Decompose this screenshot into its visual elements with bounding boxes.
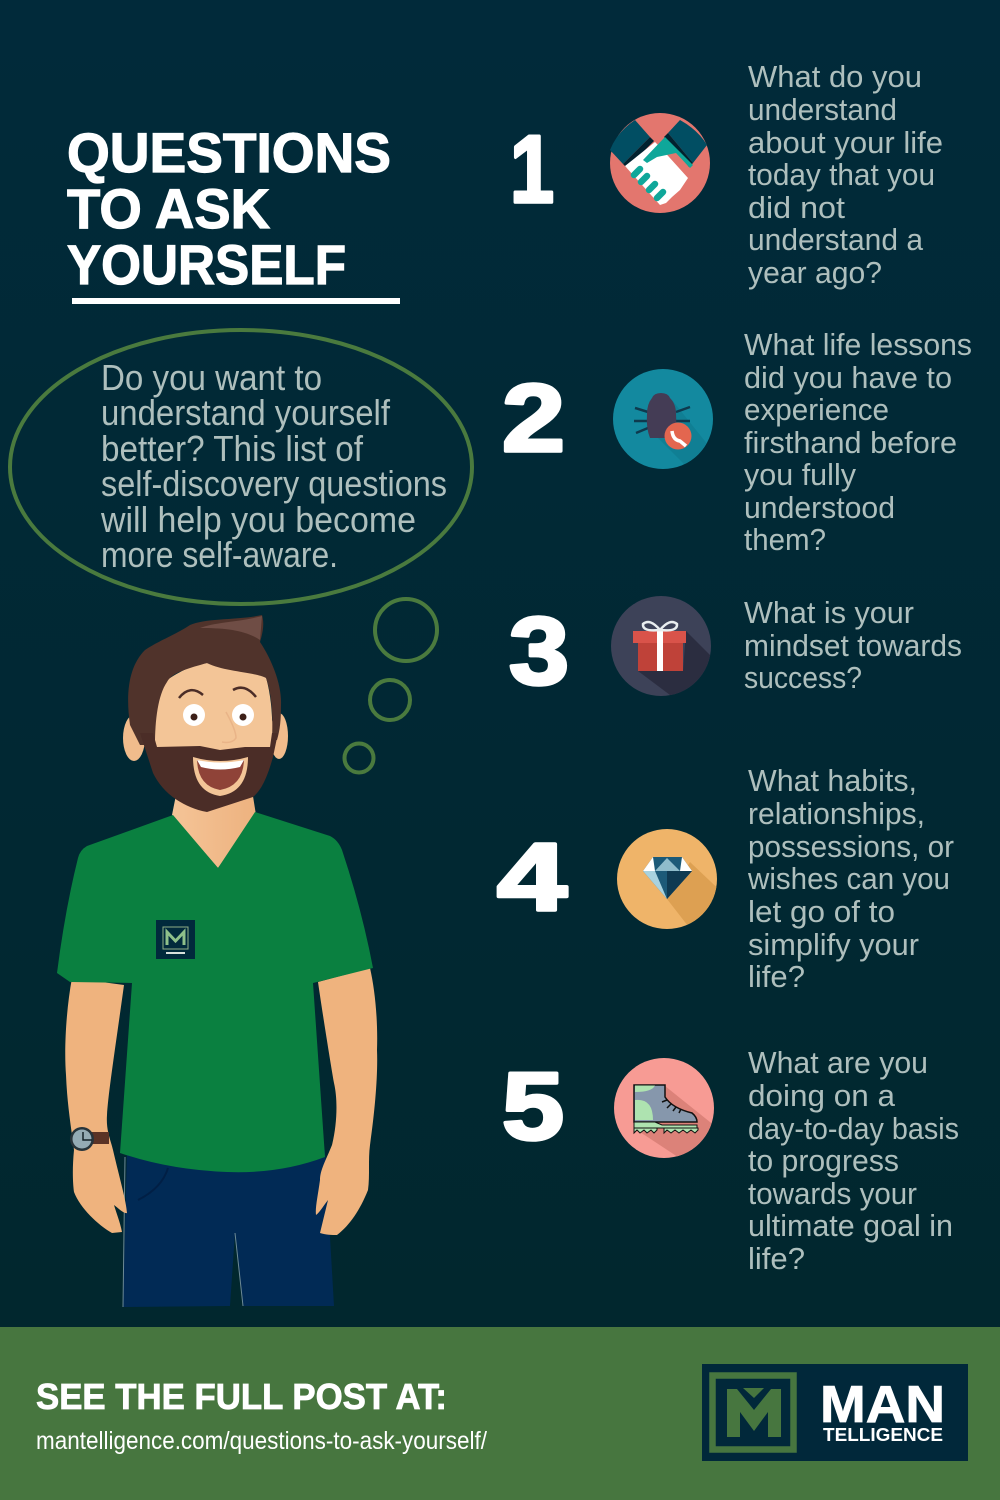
question 5 text: day-to-day basis [748, 1111, 959, 1146]
thought bubble [10, 330, 472, 772]
question 4 text: wishes can you [747, 861, 950, 896]
logo: TELLIGENCE [823, 1425, 943, 1445]
icon: gift box [611, 596, 711, 696]
nose [222, 712, 236, 742]
question 4 text: simplify your [748, 927, 919, 962]
footer call to action: SEE THE FULL POST AT: [36, 1376, 447, 1417]
shirt badge [156, 920, 195, 959]
question 2 text: them? [744, 522, 826, 557]
question 2 text: understood [744, 490, 895, 525]
question 2 text: did you have to [744, 360, 952, 395]
question 4 text: life? [748, 959, 805, 994]
icon: diamond [617, 829, 717, 929]
item 5 [502, 1045, 959, 1276]
intro text: Do you want to [101, 357, 322, 398]
question 2 text: What life lessons [744, 327, 972, 362]
question 2 text: you fully [744, 457, 856, 492]
title: QUESTIONS [67, 121, 391, 184]
question 5 text [748, 1045, 959, 1276]
logo: MAN [820, 1376, 945, 1434]
question 3 text: success? [744, 660, 862, 695]
watch [70, 1127, 109, 1151]
logo [702, 1364, 968, 1461]
pants [123, 1150, 334, 1307]
number 5: 5 [502, 1053, 564, 1160]
question 5 text: to progress [748, 1143, 899, 1178]
number 1: 1 [510, 116, 554, 223]
number 4: 4 [497, 824, 567, 931]
question 2 text [744, 327, 972, 557]
question 1 text: did not [748, 190, 845, 225]
question 4 text: let go of to [748, 894, 895, 929]
question 1 text: year ago? [748, 255, 882, 290]
number 3: 3 [509, 598, 569, 705]
item 4 [497, 763, 954, 994]
shirt [57, 812, 373, 1172]
intro text: more self-aware. [101, 534, 338, 575]
question 5 text: ultimate goal in [748, 1208, 953, 1243]
item 3 [510, 596, 961, 696]
hair [128, 615, 281, 745]
mouth [193, 757, 248, 796]
question 2 text: experience [744, 392, 889, 427]
title: TO ASK [67, 177, 270, 240]
number 2: 2 [502, 365, 565, 472]
question 4 text: possessions, or [748, 829, 954, 864]
icon: boot [614, 1058, 714, 1158]
question 4 text [747, 763, 954, 994]
question 1 text: today that you [748, 157, 935, 192]
title: YOURSELF [67, 233, 346, 296]
question 3 text: mindset towards [744, 628, 962, 663]
beard [140, 733, 278, 812]
title [67, 121, 400, 304]
question 5 text: What are you [748, 1045, 928, 1080]
neck [172, 790, 256, 868]
question 1 text: understand a [748, 222, 924, 257]
intro text: self-discovery questions [101, 463, 447, 504]
question 1 text: understand [748, 92, 897, 127]
question 2 text: firsthand before [744, 425, 957, 460]
footer url: mantelligence.com/questions-to-ask-yourself/ [36, 1427, 487, 1455]
footer band [0, 1327, 1000, 1500]
intro text [100, 357, 447, 575]
icon: bug with wrench [613, 369, 713, 470]
question 3 text [744, 595, 962, 695]
question 5 text: life? [748, 1241, 805, 1276]
intro text: will help you become [100, 499, 416, 540]
face [155, 663, 272, 790]
arms [65, 968, 377, 1235]
item 1 [510, 59, 943, 290]
question 5 text: doing on a [748, 1078, 896, 1113]
icon: handshake [610, 113, 710, 213]
question 1 text [748, 59, 943, 290]
ears [123, 715, 145, 761]
question 5 text: towards your [748, 1176, 917, 1211]
question 4 text: What habits, [748, 763, 917, 798]
eyes [179, 688, 256, 726]
question 1 text: about your life [748, 125, 943, 160]
question 3 text: What is your [744, 595, 914, 630]
character illustration [57, 615, 377, 1307]
item 2 [502, 327, 972, 557]
question 1 text: What do you [748, 59, 922, 94]
intro text: understand yourself [101, 392, 391, 433]
question 4 text: relationships, [748, 796, 925, 831]
intro text: better? This list of [101, 428, 364, 469]
